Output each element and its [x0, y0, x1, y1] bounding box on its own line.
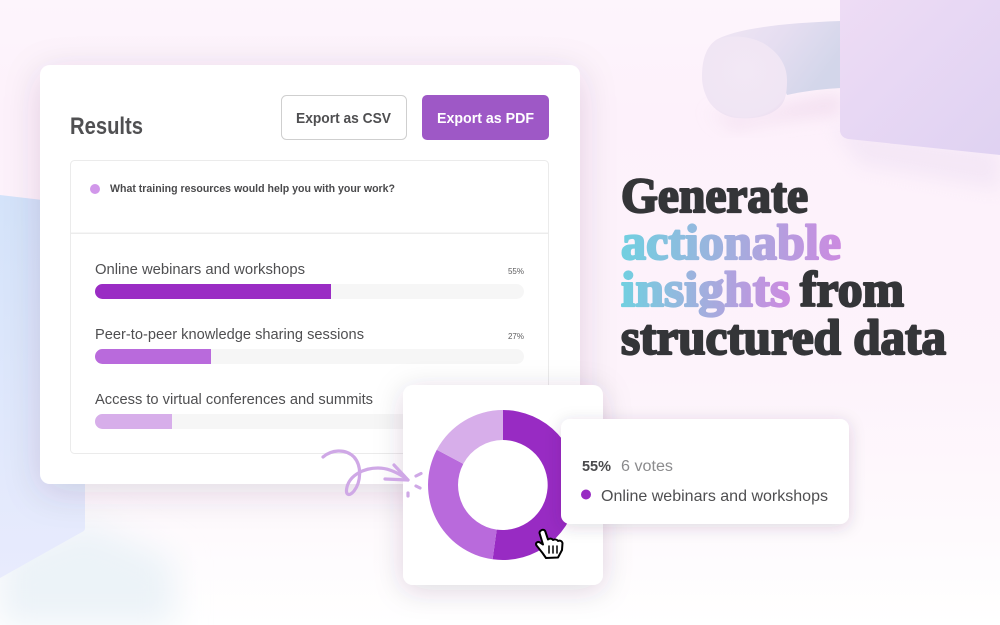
tube shadow	[705, 95, 842, 128]
tube body	[716, 21, 841, 95]
tooltip legend dot	[581, 490, 591, 500]
donut segment 18%	[437, 410, 503, 464]
headline	[621, 167, 946, 365]
3D tube shape	[702, 21, 842, 128]
tooltip legend label: Online webinars and workshops	[601, 488, 828, 505]
tooltip votes: 6 votes	[621, 458, 673, 475]
headline line 3 dark: from	[800, 261, 904, 317]
left floor shading	[0, 520, 175, 625]
headline line 1: Generate	[621, 167, 808, 223]
results inner box	[70, 160, 548, 454]
result row 1: 55%	[508, 267, 524, 276]
right block floor shadow	[830, 125, 1000, 190]
panel: results card	[40, 65, 580, 484]
result row 1: Online webinars and workshops	[95, 261, 305, 278]
right 3D block	[840, 0, 1000, 155]
donut segment 27%	[428, 450, 497, 559]
panel: tooltip	[561, 419, 849, 524]
headline line 2: actionable	[621, 214, 841, 270]
result row 3: Access to virtual conferences and summits	[95, 391, 373, 408]
card background	[40, 65, 580, 484]
result row 2: 27%	[508, 332, 524, 341]
icon: hand cursor	[536, 530, 562, 558]
tube end	[702, 36, 787, 118]
button: export as CSV	[282, 96, 406, 140]
result row 3	[95, 391, 524, 429]
button: export as PDF	[422, 95, 549, 140]
donut chart	[428, 410, 578, 560]
result row 2	[95, 326, 524, 364]
headline line 3 gradient: insights	[621, 261, 790, 317]
result row 1	[95, 261, 524, 299]
arrow	[323, 451, 421, 496]
result row 2: Peer-to-peer knowledge sharing sessions	[95, 326, 364, 343]
button: export as PDF: Export as PDF	[437, 110, 534, 127]
left 3D block	[0, 195, 85, 578]
question: What training resources would help you with your work?	[110, 183, 395, 195]
button: export as CSV: Export as CSV	[296, 110, 391, 127]
panel: donut card	[403, 385, 603, 585]
tooltip value: 55%	[582, 458, 611, 475]
donut segment 55%	[493, 410, 578, 560]
heading: results: Results	[70, 113, 143, 140]
headline line 4: structured data	[621, 309, 946, 365]
